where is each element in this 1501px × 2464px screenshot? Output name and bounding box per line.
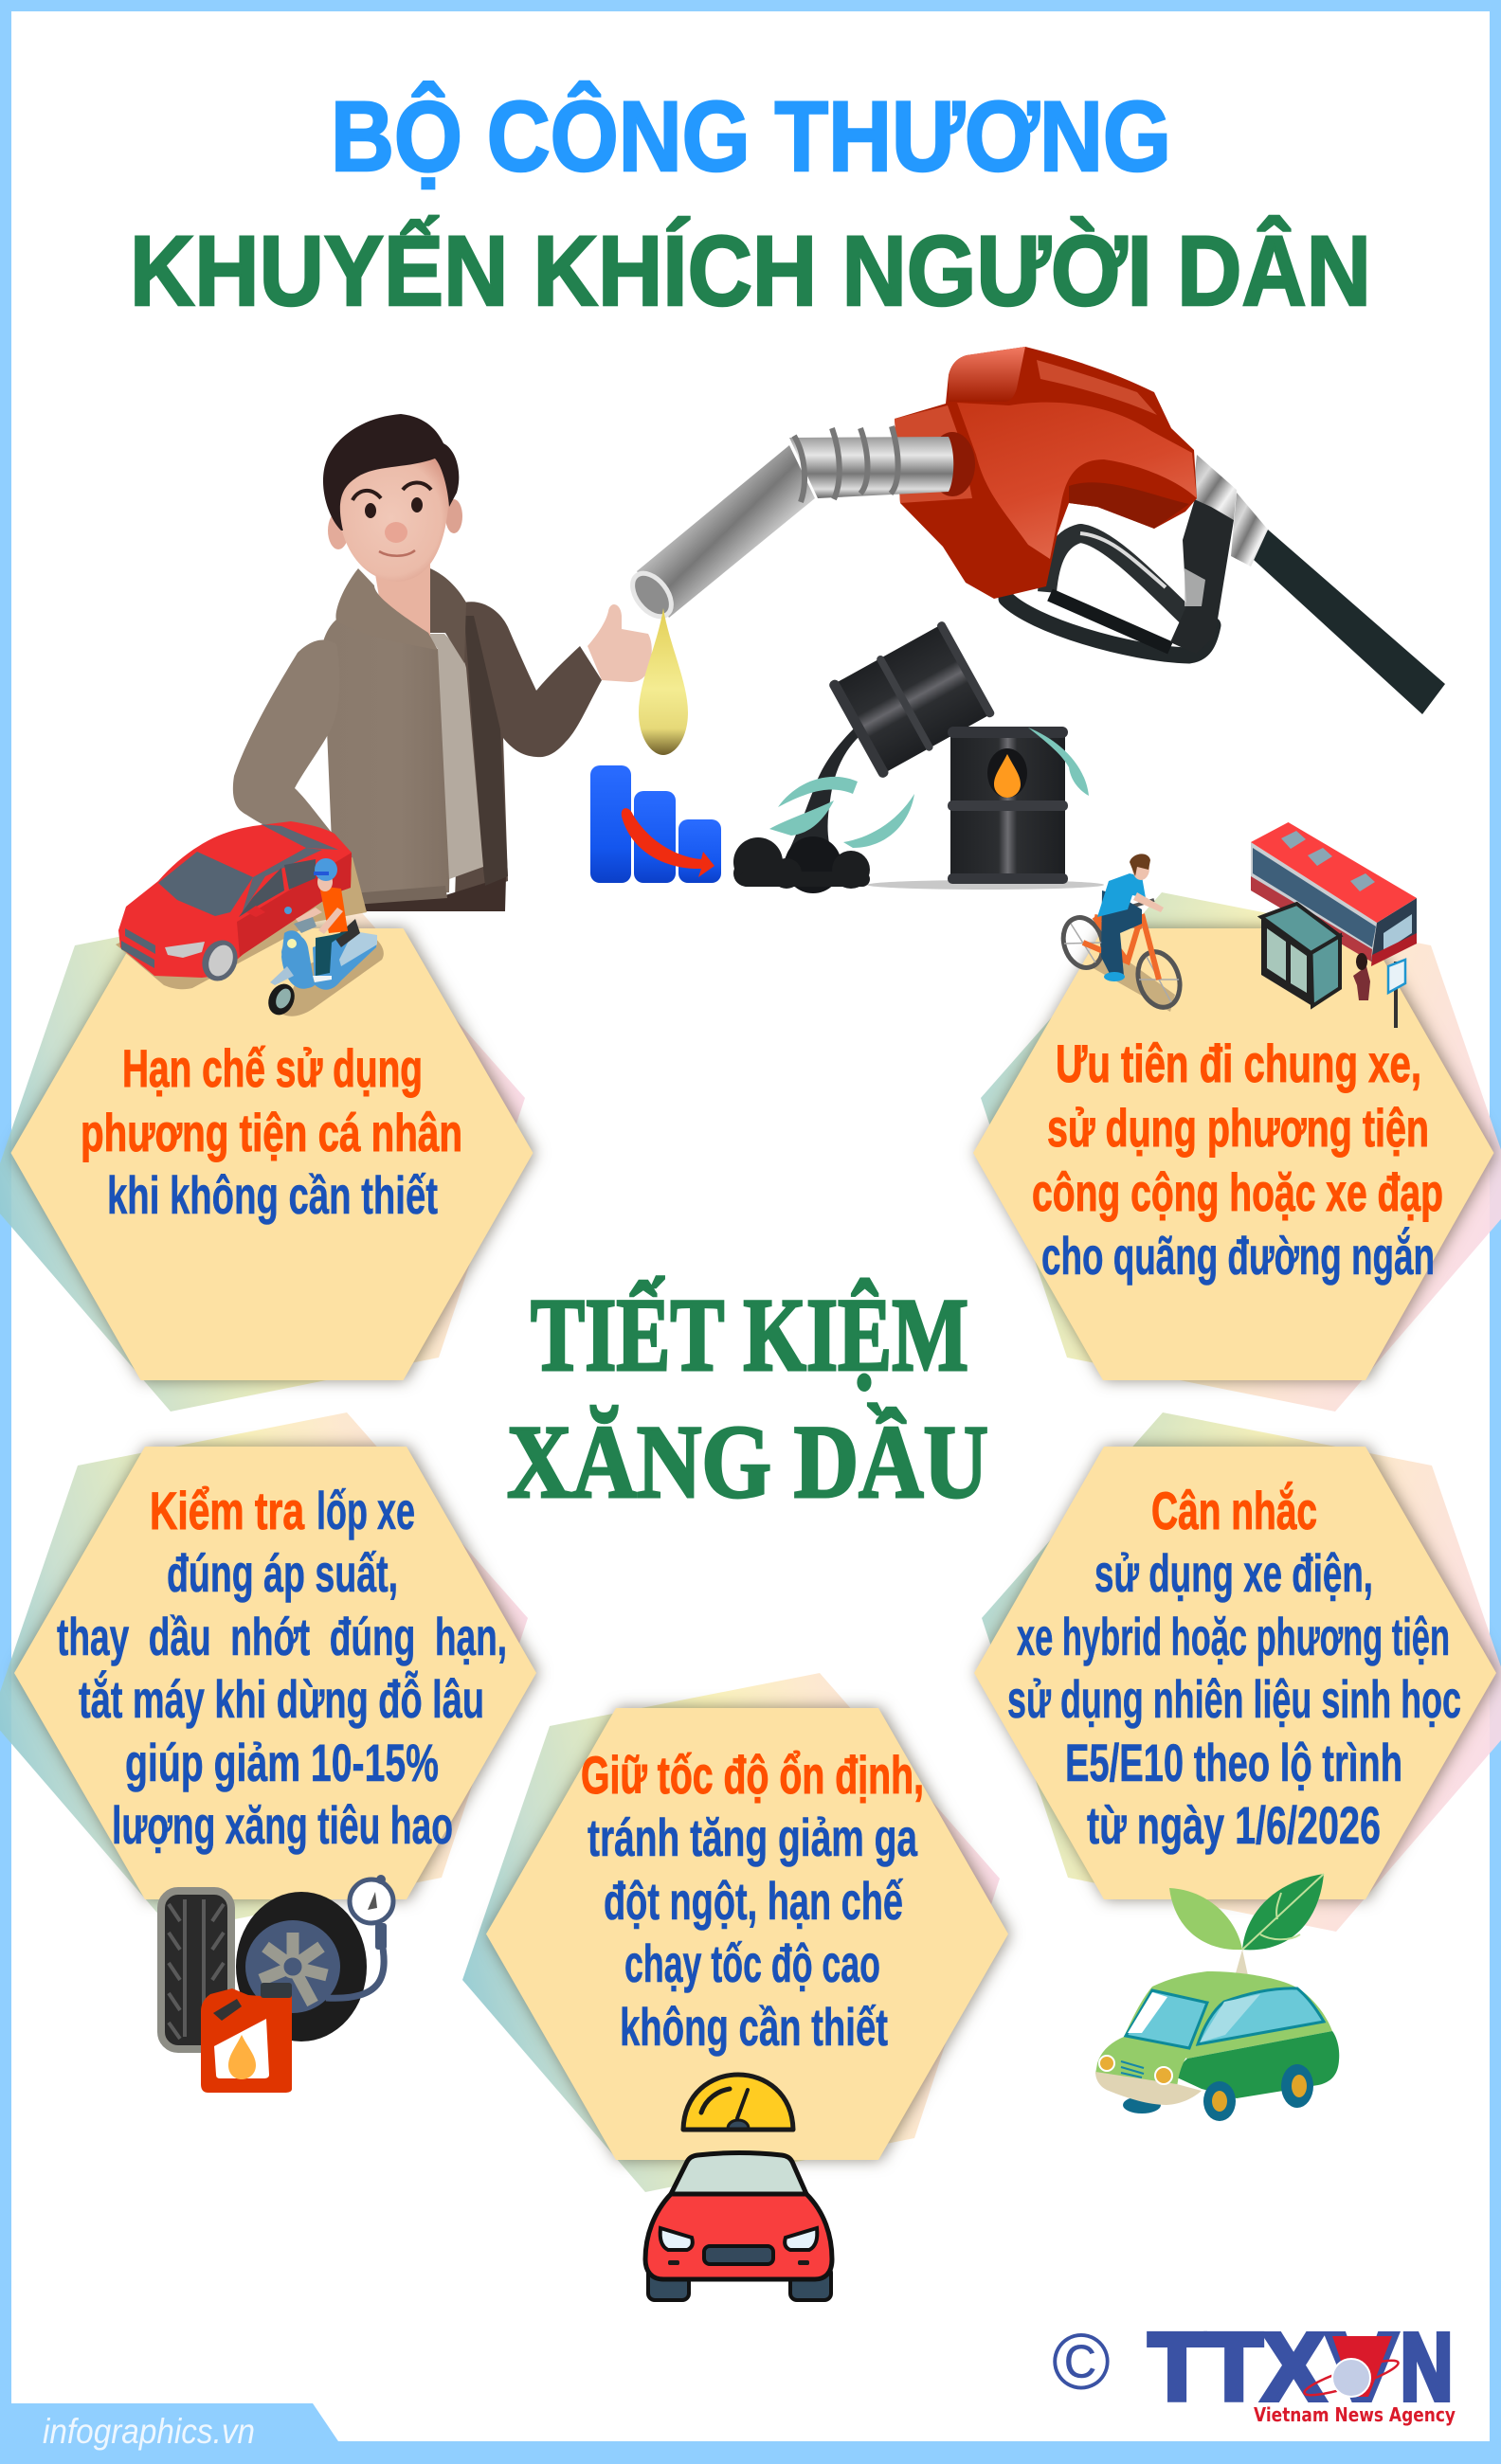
title: BỘ CÔNG THƯƠNG <box>331 81 1171 192</box>
panel: limit personal vehicles: khi không cần thiết <box>107 1165 438 1225</box>
panel: check tires and oil: lốp xe <box>316 1481 415 1540</box>
panel: keep steady speed: không cần thiết <box>620 1997 888 2057</box>
panel: keep steady speed: đột ngột, hạn chế <box>604 1871 904 1931</box>
panel: carpool and public transport <box>973 928 1493 1380</box>
panel: check tires and oil: lượng xăng tiêu hao <box>112 1795 453 1855</box>
illustration: oil barrels and spill <box>733 620 1104 893</box>
icon: tire, gauge and oil can <box>161 1875 393 2093</box>
logo: copyright mark: © <box>1052 2317 1111 2406</box>
icon: red car front view <box>645 2152 832 2300</box>
panel: check tires and oil: tắt máy khi dừng đỗ lâu <box>79 1669 484 1729</box>
logo: TTXVN Vietnam News Agency: Vietnam News Agency <box>1254 2403 1456 2426</box>
panel: check tires and oil: giúp giảm 10-15% <box>125 1733 439 1792</box>
panel: check tires and oil: Kiểm tra <box>150 1481 305 1540</box>
logo: TTXVN Vietnam News Agency: V <box>1327 2314 1397 2420</box>
panel: consider electric vehicles: từ ngày 1/6/2026 <box>1087 1795 1381 1855</box>
logo: TTXVN Vietnam News Agency <box>1148 2314 1456 2426</box>
panel: keep steady speed: tránh tăng giảm ga <box>588 1808 918 1867</box>
panel: check tires and oil <box>14 1447 536 1899</box>
panel: consider electric vehicles <box>974 1447 1496 1899</box>
panel: consider electric vehicles: Cân nhắc <box>1151 1481 1317 1540</box>
icon: falling bar chart <box>590 765 721 883</box>
heading: save fuel: TIẾT KIỆM <box>531 1276 968 1393</box>
icon: oil droplet <box>639 608 688 755</box>
icon: cyclist <box>1058 854 1186 1013</box>
heading: save fuel <box>507 1276 988 1520</box>
title: KHUYẾN KHÍCH NGƯỜI DÂN <box>130 214 1371 327</box>
illustration: fuel nozzle <box>624 347 1445 714</box>
panel: limit personal vehicles: Hạn chế sử dụng <box>122 1038 423 1098</box>
logo: TTXVN Vietnam News Agency: TTX <box>1148 2314 1325 2420</box>
panel: limit personal vehicles <box>11 928 533 1380</box>
icon: green eco car <box>1095 1874 1339 2121</box>
panel: keep steady speed <box>486 1708 1008 2160</box>
panel: limit personal vehicles: phương tiện cá nhân <box>81 1103 462 1162</box>
icon: city bus and shelter <box>1251 822 1417 1028</box>
panel: check tires and oil: thay dầu nhớt đúng hạn, <box>57 1607 507 1666</box>
logo: TTXVN Vietnam News Agency: N <box>1401 2314 1453 2420</box>
panel: keep steady speed: chạy tốc độ cao <box>624 1933 880 1993</box>
footer tab with website <box>11 2403 338 2451</box>
icon: speedometer <box>683 2075 793 2130</box>
panel: check tires and oil: đúng áp suất, <box>167 1543 398 1603</box>
decorative hexagon backs <box>0 892 1501 2192</box>
footer tab with website: infographics.vn <box>43 2412 255 2451</box>
panel: keep steady speed: Giữ tốc độ ổn định, <box>581 1745 924 1805</box>
heading: save fuel: XĂNG DẦU <box>507 1404 988 1520</box>
illustration: man in hooded jacket <box>233 414 652 911</box>
title <box>130 81 1371 327</box>
icon: red car and scooter <box>116 821 384 1019</box>
